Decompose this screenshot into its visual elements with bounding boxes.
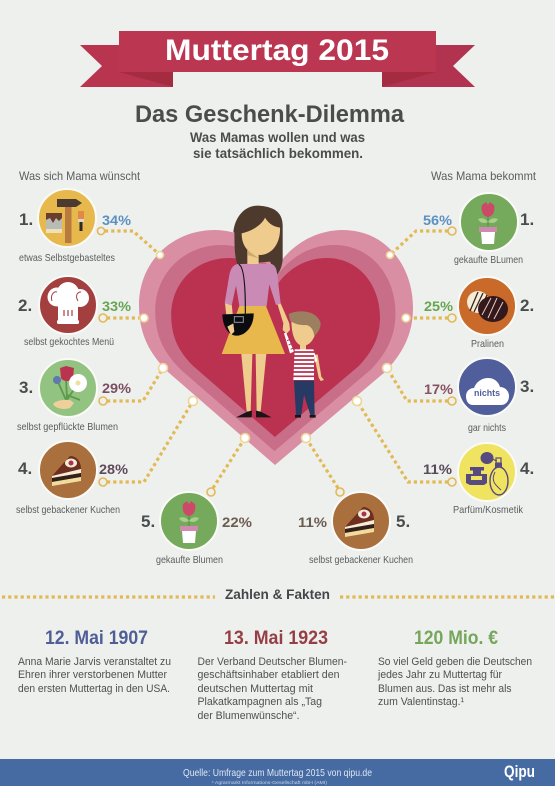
fact: 12. Mai 1907: [18, 628, 171, 695]
subheading: [190, 130, 365, 161]
icon: hammer and paint: [46, 199, 84, 243]
fact: 12. Mai 1907: Anna Marie Jarvis veranstaltet zu: [18, 656, 171, 668]
mother: [222, 206, 290, 417]
fact: 120 Mio. Euro: jedes Jahr zu Muttertag für: [377, 669, 502, 681]
item 4 right: Parfuem: 11%: [423, 461, 453, 477]
item 3 right: gar nichts: gar nichts: [468, 422, 506, 434]
icon: tulip: [478, 202, 498, 244]
footer bar: Quelle: Umfrage zum Muttertag 2015 von qipu.de: [183, 767, 372, 779]
fact: 13. Mai 1923: der Blumenwünsche“.: [198, 710, 300, 722]
footer bar: ¹ Agrarmarkt Informations-Gesellschaft mbH (AMI): [212, 780, 328, 785]
icon: cloud: nichts: [474, 388, 500, 398]
fact: 120 Mio. Euro: Blumen aus. Das ist mehr als: [378, 683, 512, 695]
item 4 left: gebackener Kuchen: 4.: [18, 459, 32, 478]
item 3 right: gar nichts: [424, 358, 534, 434]
item 5 left: gekaufte Blumen: gekaufte Blumen: [156, 554, 223, 566]
item 2 left: gekochtes Menue: 33%: [102, 298, 132, 314]
fact: 120 Mio. Euro: So viel Geld geben die Deutschen: [378, 656, 532, 668]
child: [284, 311, 324, 418]
item 2 right: Pralinen: Pralinen: [471, 338, 504, 350]
icon: cake slice: [345, 507, 374, 537]
item 3 left: gepflueckte Blumen: selbst gepflückte Blumen: [17, 421, 118, 433]
footer bar: Qipu: [504, 762, 535, 781]
fact: 13. Mai 1923: Plakatkampagnen als „Tag: [198, 696, 322, 708]
fact: 13. Mai 1923: [198, 628, 347, 722]
fact: 12. Mai 1907: den ersten Muttertag in den USA.: [18, 683, 170, 695]
item 4 right: Parfuem: 4.: [520, 459, 534, 478]
item 1 left: selbstgebasteltes: [19, 189, 132, 264]
item 1 right: gekaufte Blumen: [423, 193, 534, 266]
item 5 right: gebackener Kuchen: 11%: [298, 514, 328, 530]
item 5 left: gekaufte Blumen: [141, 492, 253, 566]
fact: 12. Mai 1907: Ehren ihrer verstorbenen Mutter: [18, 669, 167, 681]
item 5 right: gebackener Kuchen: selbst gebackener Kuchen: [309, 554, 413, 566]
fact: 120 Mio. Euro: zum Valentinstag.¹: [378, 696, 464, 708]
icon: tulip: [179, 501, 199, 543]
item 2 right: Pralinen: 2.: [520, 296, 534, 315]
icon: chef hat: [48, 282, 89, 324]
heart: [139, 230, 413, 465]
fact: 13. Mai 1923: geschäftsinhaber etabliert den: [198, 669, 340, 681]
item 1 right: gekaufte Blumen: gekaufte BLumen: [454, 254, 523, 266]
title: Muttertag 2015: [165, 34, 389, 67]
item 3 left: gepflueckte Blumen: [17, 359, 132, 433]
item 4 right: Parfuem: [423, 443, 534, 516]
item 3 left: gepflueckte Blumen: 3.: [19, 378, 33, 397]
item 4 left: gebackener Kuchen: selbst gebackener Kuchen: [16, 504, 120, 516]
icon: bouquet and hand: [53, 366, 87, 409]
handbag: [222, 264, 254, 336]
subheading: Was Mamas wollen und was: [190, 130, 365, 145]
item 1 left: selbstgebasteltes: 1.: [19, 210, 33, 229]
item 1 left: selbstgebasteltes: 34%: [102, 212, 132, 228]
fact: 120 Mio. Euro: [377, 628, 532, 708]
item 4 right: Parfuem: Parfüm/Kosmetik: [453, 504, 524, 516]
icon: pralines: [467, 291, 508, 322]
fact: 13. Mai 1923: 13. Mai 1923: [224, 628, 328, 649]
column heading: wishes: Was sich Mama wünscht: [19, 169, 141, 183]
fact: 13. Mai 1923: deutschen Muttertag mit: [198, 683, 313, 695]
item 5 right: gebackener Kuchen: 5.: [396, 512, 410, 531]
item 5 left: gekaufte Blumen: 22%: [222, 514, 253, 530]
item 1 left: selbstgebasteltes: etwas Selbstgebasteltes: [19, 252, 115, 264]
item 1 right: gekaufte Blumen: 56%: [423, 212, 453, 228]
item 5 right: gebackener Kuchen: [298, 492, 413, 566]
item 4 left: gebackener Kuchen: 28%: [99, 461, 129, 477]
item 2 right: Pralinen: [424, 277, 534, 350]
item 3 right: gar nichts: 17%: [424, 381, 454, 397]
footer bar: [0, 759, 555, 786]
mother and child illustration: [222, 206, 324, 418]
connector lines: [97, 227, 456, 496]
section heading: Zahlen und Fakten: Zahlen & Fakten: [225, 586, 330, 602]
item 4 left: gebackener Kuchen: [16, 441, 129, 516]
column heading: receives: Was Mama bekommt: [431, 169, 537, 183]
subheading: sie tatsächlich bekommen.: [193, 146, 363, 161]
banner ribbon: [80, 31, 475, 87]
item 5 left: gekaufte Blumen: 5.: [141, 512, 155, 531]
fact: 13. Mai 1923: Der Verband Deutscher Blumen-: [198, 656, 347, 668]
icon: perfume: [466, 452, 508, 495]
item 2 left: gekochtes Menue: 2.: [18, 296, 32, 315]
icon: cake slice: [52, 456, 81, 486]
heading: Das Geschenk-Dilemma: [135, 101, 405, 128]
item 3 right: gar nichts: 3.: [520, 377, 534, 396]
fact: 120 Mio. Euro: 120 Mio. €: [414, 628, 498, 649]
item 1 right: gekaufte Blumen: 1.: [520, 210, 534, 229]
item 2 right: Pralinen: 25%: [424, 298, 454, 314]
item 2 left: gekochtes Menue: [18, 276, 132, 348]
fact: 12. Mai 1907: 12. Mai 1907: [45, 628, 148, 649]
item 3 left: gepflueckte Blumen: 29%: [102, 380, 132, 396]
item 2 left: gekochtes Menue: selbst gekochtes Menü: [24, 336, 114, 348]
